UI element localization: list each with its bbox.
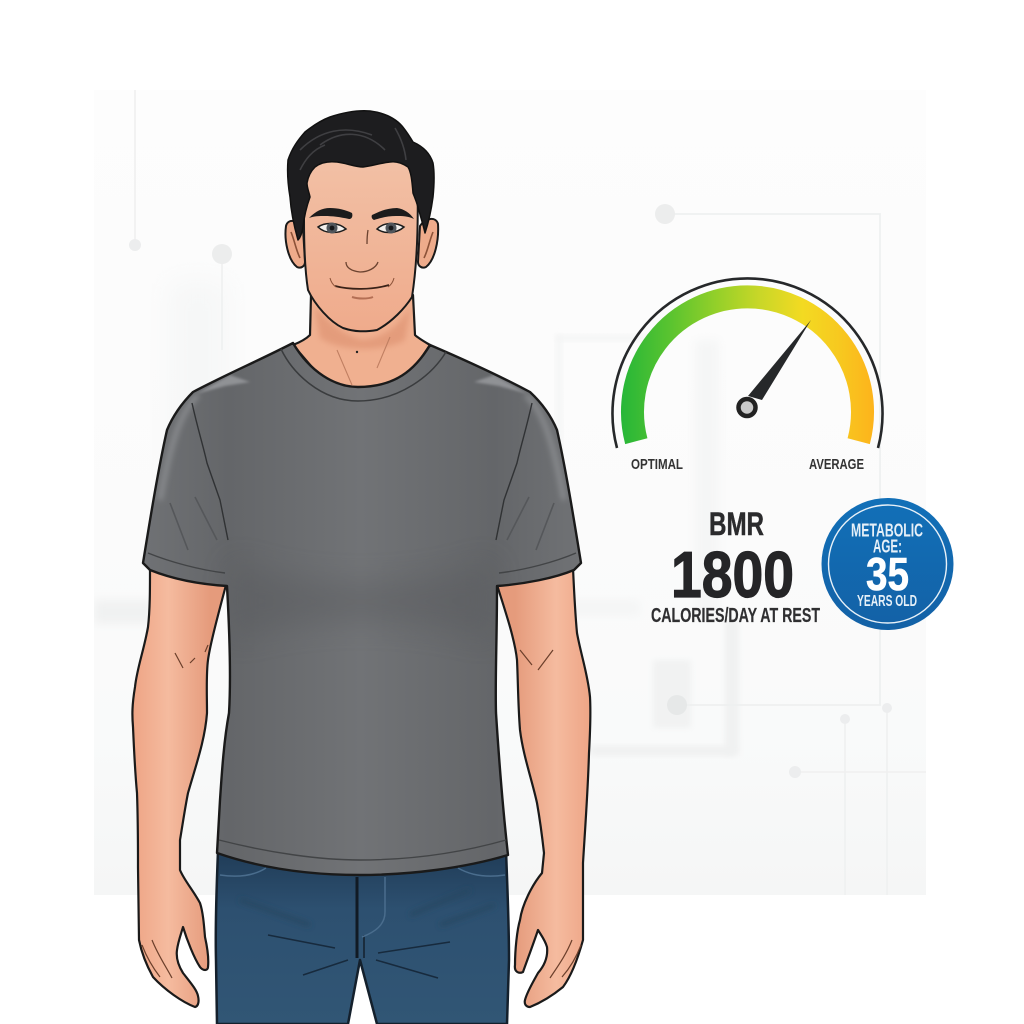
badge: metabolic age <box>822 498 954 630</box>
BMR readout <box>651 506 820 627</box>
illustration: man in grey t-shirt and jeans <box>132 111 590 1024</box>
neck <box>293 295 430 392</box>
jeans <box>216 850 509 1024</box>
BMR unit: CALORIES/DAY AT REST <box>651 605 820 627</box>
head <box>285 111 438 331</box>
gauge coloured band <box>632 297 862 441</box>
eyebrows <box>309 208 414 220</box>
hem stitches <box>148 553 576 860</box>
BMR heading: BMR <box>709 506 764 542</box>
badge unit: YEARS OLD <box>857 593 917 610</box>
ears <box>285 219 438 268</box>
face <box>304 145 418 331</box>
label: optimal: OPTIMAL <box>631 456 683 473</box>
badge value: 35 <box>866 548 909 600</box>
hair <box>288 111 434 240</box>
BMR value: 1800 <box>671 538 794 611</box>
gauge outer arc <box>612 278 883 448</box>
gauge chart <box>612 278 883 473</box>
sleeve seams and folds <box>192 403 532 540</box>
left arm and hand <box>132 568 226 1007</box>
right arm and hand <box>497 568 590 1007</box>
t-shirt <box>143 343 581 875</box>
panel: blurred background with circuit lines <box>94 90 926 895</box>
badge label: METABOLIC <box>851 520 923 540</box>
gauge needle <box>738 320 811 416</box>
mouth <box>330 278 394 298</box>
badge label line two: AGE: <box>873 536 902 556</box>
nose <box>346 230 378 272</box>
eyes <box>318 222 404 234</box>
collar stitch <box>281 349 446 401</box>
label: average: AVERAGE <box>809 456 864 473</box>
